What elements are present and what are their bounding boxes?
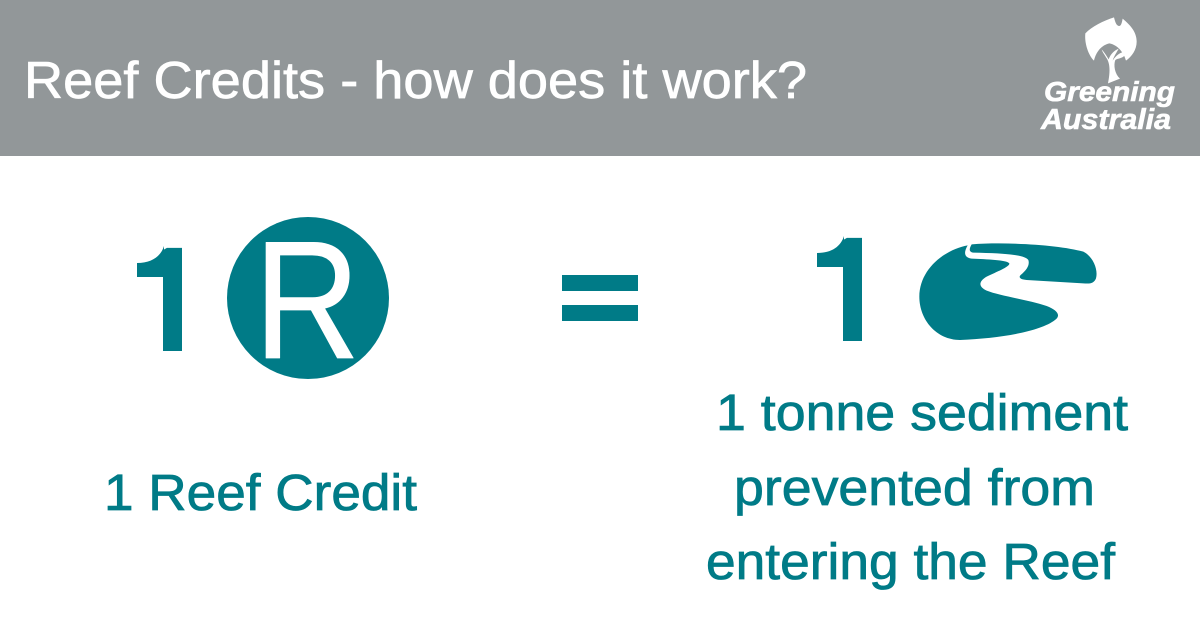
logo: Greening Australia	[1040, 17, 1175, 136]
left numeral 1: 1	[127, 186, 211, 393]
logo wordmark: Greening	[1044, 76, 1175, 107]
label: sediment description	[706, 384, 1128, 590]
label: sediment description: entering the Reef	[706, 533, 1116, 590]
equals sign	[562, 275, 638, 321]
header band	[0, 0, 1200, 156]
label: sediment description: 1 tonne sediment	[716, 384, 1128, 441]
label: sediment description: prevented from	[734, 459, 1095, 516]
icon: Australia-shaped tree canopy	[1085, 17, 1137, 83]
right numeral 1: 1	[807, 176, 891, 383]
icon: river sediment	[919, 243, 1097, 340]
left numeral 1	[137, 246, 182, 351]
right numeral 1	[817, 236, 862, 341]
label: 1 Reef Credit: 1 Reef Credit	[104, 464, 417, 521]
icon: Reef Credit R in circle: R	[254, 206, 360, 394]
title: Reef Credits - how does it work?	[24, 52, 807, 110]
logo: Greening Australia: Australia	[1040, 104, 1171, 136]
